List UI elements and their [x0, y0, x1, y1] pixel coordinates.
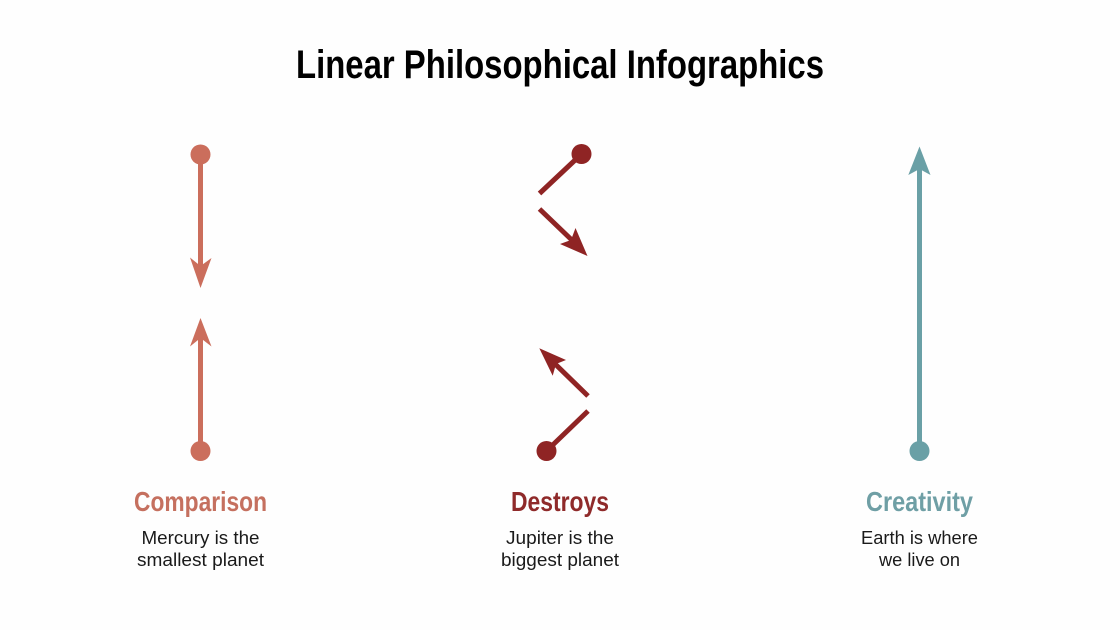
- text: creativity description: we live on: [878, 550, 960, 570]
- text: comparison description: smallest planet: [137, 550, 264, 570]
- arrow: creativity upward: [908, 146, 930, 461]
- panel: destroys: [501, 144, 619, 570]
- arrow: destroys broken downward: [540, 144, 592, 256]
- arrow: comparison upward: [190, 318, 212, 461]
- text: comparison description: [137, 528, 264, 570]
- heading: creativity: Creativity: [866, 486, 973, 517]
- heading: comparison: Comparison: [134, 486, 267, 517]
- text: creativity description: [861, 528, 978, 570]
- text: destroys description: [501, 528, 619, 570]
- title: Linear Philosophical Infographics: [296, 43, 824, 87]
- panel: creativity: [861, 146, 978, 570]
- heading: destroys: Destroys: [511, 486, 609, 517]
- text: creativity description: Earth is where: [861, 528, 978, 548]
- text: destroys description: biggest planet: [501, 550, 619, 570]
- arrow: destroys broken upward: [536, 348, 588, 461]
- text: comparison description: Mercury is the: [142, 528, 260, 548]
- panel: comparison: [134, 144, 267, 570]
- text: destroys description: Jupiter is the: [506, 528, 614, 548]
- arrow: comparison downward: [190, 144, 212, 288]
